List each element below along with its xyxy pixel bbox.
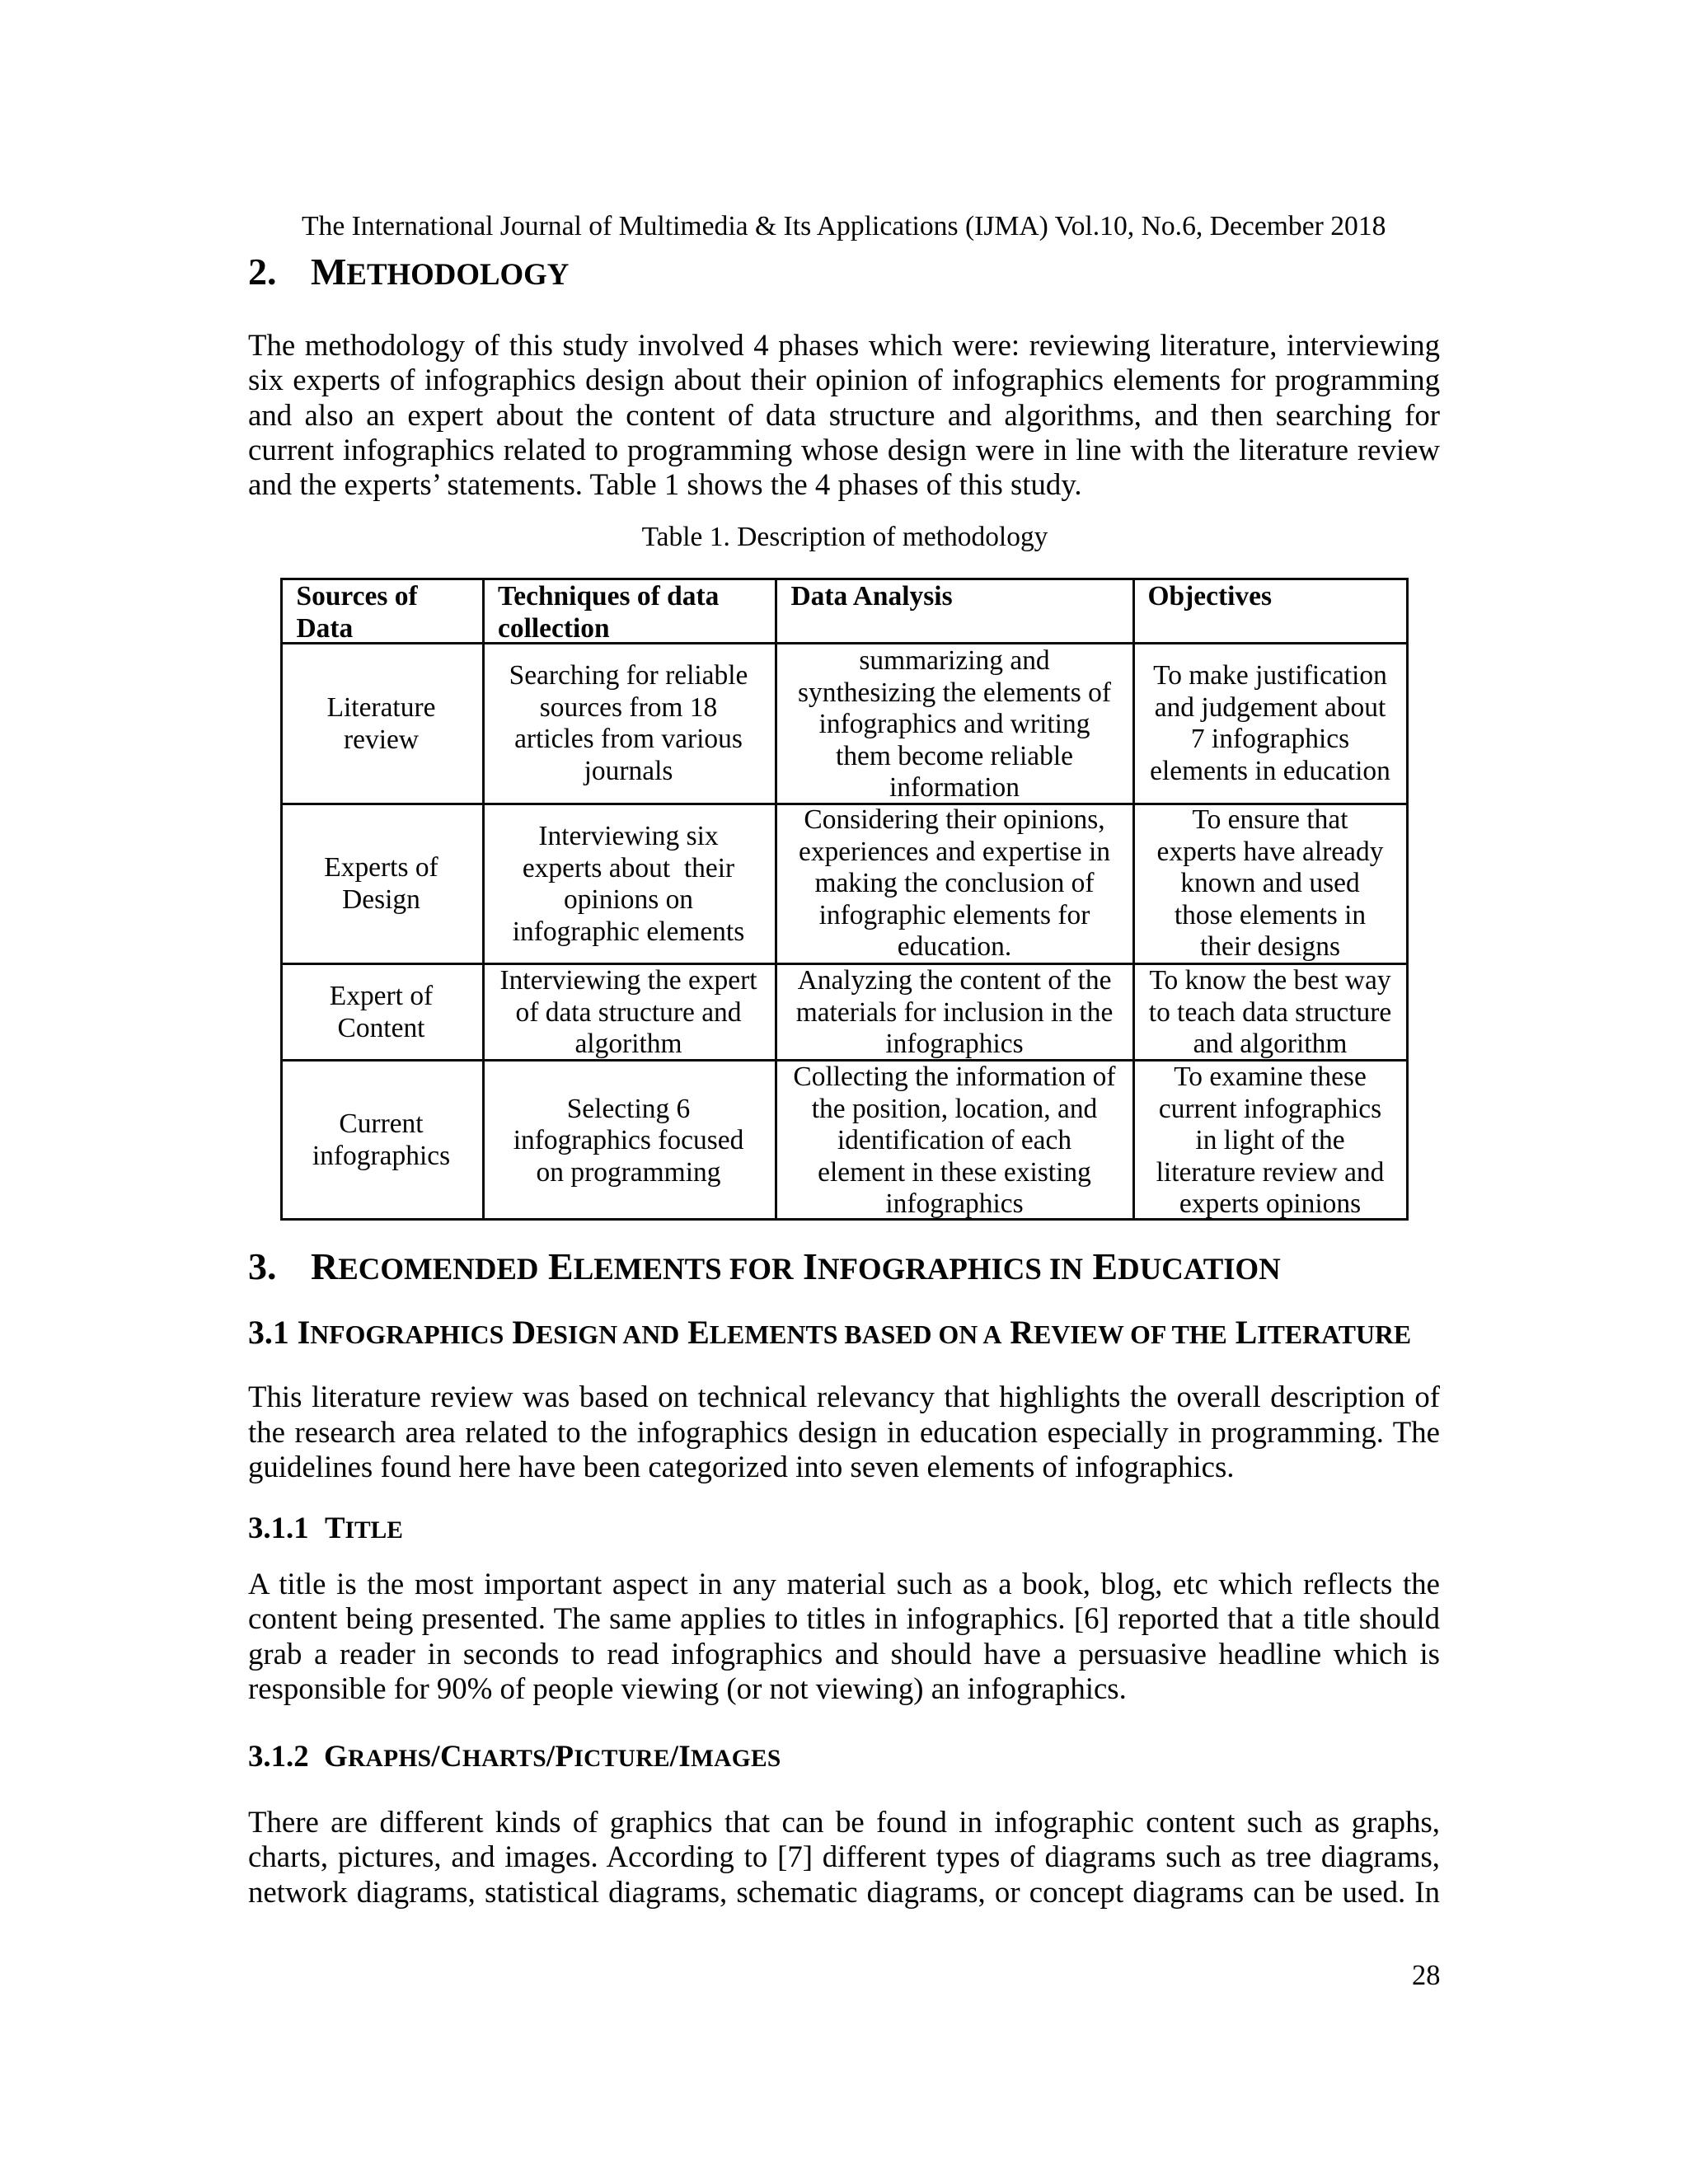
text block: title paragraph: responsible for 90% of people viewing (or not viewing) an infographics. <box>248 1671 1127 1705</box>
table row: experts of design: those elements in <box>1175 900 1366 930</box>
subheading: 3.1.1 Title <box>248 1511 403 1544</box>
text block: methodology paragraph: and the experts’ statements. Table 1 shows the 4 phases of this study. <box>248 467 1082 501</box>
subheading: 3.1.2 Graphs/Charts/Picture/Images: 3.1.2 <box>248 1739 309 1772</box>
table row: current infographics: Selecting 6 <box>567 1094 690 1124</box>
text block: title paragraph <box>248 1567 1440 1705</box>
table row: current infographics: in light of the <box>1195 1125 1345 1155</box>
table row: expert of content: infographics <box>885 1029 1024 1059</box>
text block: graphics paragraph: There are different kinds of graphics that can be found in infographic content such as graphs, <box>248 1805 1440 1839</box>
table row: current infographics: identification of each <box>837 1125 1071 1155</box>
table row: experts of design: Considering their opinions, <box>804 804 1105 835</box>
table row: expert of content: and algorithm <box>1193 1029 1347 1059</box>
text block: literature review intro: This literature review was based on technical relevancy that highlights the overall description of <box>248 1380 1440 1413</box>
table row: current infographics: infographics <box>312 1141 450 1171</box>
table row: literature review: review <box>344 724 419 755</box>
text block: literature review intro: guidelines found here have been categorized into seven elements of infographics. <box>248 1450 1234 1483</box>
table row: experts of design: infographic elements <box>513 916 744 947</box>
table row: expert of content: To know the best way <box>1149 965 1391 996</box>
table row: current infographics: To examine these <box>1174 1062 1367 1092</box>
table header row: Objectives <box>1147 581 1272 612</box>
table row: current infographics: the position, location, and <box>812 1094 1097 1124</box>
table row: current infographics: current infographics <box>1159 1094 1381 1124</box>
table row: experts of design <box>324 804 1383 962</box>
text block: methodology paragraph: current infographics related to programming whose design were in line with the literature review <box>248 433 1440 466</box>
heading: 2. Methodology: METHODOLOGY <box>311 251 569 293</box>
table row: expert of content <box>330 965 1391 1059</box>
table row: experts of design: infographic elements for <box>819 900 1090 930</box>
table row: literature review: infographics and writing <box>819 709 1090 739</box>
table row: literature review: 7 infographics <box>1191 724 1349 754</box>
table row: literature review: Searching for reliable <box>509 660 748 691</box>
table header row: Data <box>297 613 353 643</box>
table row: current infographics: experts opinions <box>1179 1188 1361 1219</box>
table row: literature review: them become reliable <box>836 741 1073 771</box>
table row: current infographics: infographics focused <box>513 1125 743 1155</box>
text block: title paragraph: content being presented. The same applies to titles in infographics. [6] reported that a title should <box>248 1601 1440 1635</box>
table row: expert of content: algorithm <box>574 1029 682 1059</box>
subheading: 3.1.1 Title: TITLE <box>325 1511 403 1544</box>
table row: literature review: information <box>889 772 1020 803</box>
table row: expert of content: Analyzing the content of the <box>798 965 1111 996</box>
table row: experts of design: Design <box>342 884 420 915</box>
text block: title paragraph: grab a reader in seconds to read infographics and should have a persuasive headline which is <box>248 1637 1440 1671</box>
subheading: 3.1.1 Title: 3.1.1 <box>248 1511 309 1544</box>
table header row: Sources of <box>297 581 418 612</box>
table row: current infographics: infographics <box>885 1188 1024 1219</box>
table row: literature review: Literature <box>327 692 435 723</box>
table row: experts of design: experts about their <box>523 853 734 883</box>
table row: experts of design: To ensure that <box>1192 804 1348 835</box>
table row: literature review: sources from 18 <box>540 692 717 723</box>
table row: literature review: articles from various <box>514 724 743 754</box>
subheading: 3.1: 3.1 INFOGRAPHICS DESIGN AND ELEMENTS BASED ON A REVIEW OF THE LITERATURE <box>248 1315 1411 1351</box>
table row: experts of design: experts have already <box>1157 837 1383 867</box>
table row: current infographics: Collecting the information of <box>793 1062 1116 1092</box>
table row: expert of content: Expert of <box>330 981 433 1011</box>
heading: 3. Recomended elements: RECOMENDED ELEMENTS FOR INFOGRAPHICS IN EDUCATION <box>311 1245 1281 1287</box>
table header row: Techniques of data <box>498 581 719 612</box>
table row: literature review: synthesizing the elements of <box>798 677 1111 708</box>
table row: expert of content: Interviewing the expert <box>499 965 757 996</box>
table row: expert of content: to teach data structure <box>1149 997 1391 1028</box>
table row: experts of design: education. <box>898 931 1011 962</box>
text block: methodology paragraph <box>248 328 1440 501</box>
table row: literature review: To make justification <box>1153 660 1387 691</box>
table row: literature review: journals <box>584 756 673 786</box>
table row: literature review: and judgement about <box>1155 692 1386 723</box>
heading: 2. Methodology: 2. <box>248 251 277 293</box>
table row: experts of design: experiences and expertise in <box>799 837 1110 867</box>
table row: experts of design: Interviewing six <box>538 821 719 851</box>
text block: graphics paragraph: charts, pictures, and images. According to [7] different types of diagrams such as tree diagrams, <box>248 1840 1440 1873</box>
table caption: Table 1. Description of methodology <box>642 522 1048 552</box>
text block: methodology paragraph: The methodology of this study involved 4 phases which were: reviewing literature, interviewing <box>248 328 1440 362</box>
page number: 28 <box>1412 1960 1441 1991</box>
table row: current infographics: literature review and <box>1156 1157 1384 1188</box>
table header row <box>297 581 1272 643</box>
table header row: collection <box>498 613 610 643</box>
text block: title paragraph: A title is the most important aspect in any material such as a book, blog, etc which reflects the <box>248 1567 1440 1601</box>
text block: literature review intro: the research area related to the infographics design in education especially in programming. The <box>248 1415 1440 1449</box>
table row: experts of design: making the conclusion of <box>814 868 1095 898</box>
table row: literature review: summarizing and <box>859 645 1050 676</box>
text block: graphics paragraph <box>248 1805 1440 1909</box>
heading: 3. Recomended elements: 3. <box>248 1245 277 1287</box>
table row: experts of design: Experts of <box>324 852 438 883</box>
text block: methodology paragraph: six experts of infographics design about their opinion of infographics elements for programming <box>248 363 1440 396</box>
subheading: 3.1.2 Graphs/Charts/Picture/Images: GRAPHS/CHARTS/PICTURE/IMAGES <box>324 1739 781 1772</box>
table row: experts of design: their designs <box>1200 931 1340 962</box>
table row: current infographics: Current <box>339 1108 424 1139</box>
text block: methodology paragraph: and also an expert about the content of data structure and algorithms, and then searching for <box>248 398 1440 432</box>
table row: current infographics <box>312 1062 1384 1219</box>
text block: literature review intro <box>248 1380 1440 1483</box>
table row: experts of design: opinions on <box>564 884 693 915</box>
table: description of methodology <box>280 578 1409 1221</box>
table row: literature review <box>327 645 1390 803</box>
table row: expert of content: of data structure and <box>515 997 742 1028</box>
table row: current infographics: element in these existing <box>818 1157 1091 1188</box>
running header: The International Journal of Multimedia & Its Applications (IJMA) Vol.10, No.6, December 2018 <box>302 211 1386 241</box>
table header row: Data Analysis <box>791 581 953 612</box>
table row: expert of content: Content <box>338 1013 424 1043</box>
table row: expert of content: materials for inclusion in the <box>796 997 1113 1028</box>
table row: current infographics: on programming <box>537 1157 720 1188</box>
text block: graphics paragraph: network diagrams, statistical diagrams, schematic diagrams, or concept diagrams can be used. In <box>248 1875 1440 1909</box>
table row: experts of design: known and used <box>1180 868 1360 898</box>
table row: literature review: elements in education <box>1150 756 1390 786</box>
